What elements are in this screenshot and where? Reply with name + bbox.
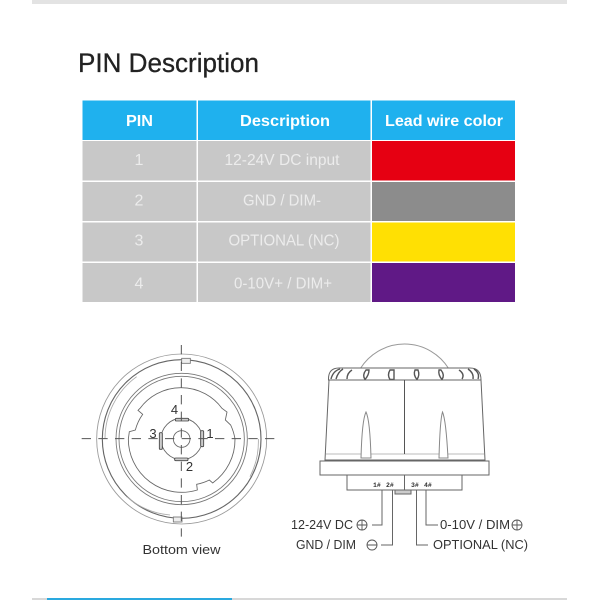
lead labels: 12-24V DC <box>291 517 353 532</box>
nub <box>395 490 411 494</box>
pin number labels: 3 <box>149 426 157 441</box>
block seam <box>404 475 406 490</box>
body <box>325 380 485 460</box>
top band <box>328 368 481 380</box>
pin number labels: 1 <box>206 426 214 441</box>
pin number labels: 4 <box>171 402 178 417</box>
centre lines <box>82 345 277 537</box>
outer rings <box>97 354 267 524</box>
header labels: Lead wire color <box>385 113 503 130</box>
centre circles <box>161 418 202 460</box>
table: PIN description <box>82 100 515 302</box>
pin markers <box>373 482 432 489</box>
pin descriptions: OPTIONAL (NC) <box>228 232 340 250</box>
dome <box>361 344 448 368</box>
band slots <box>331 369 478 380</box>
lead labels: OPTIONAL (NC) <box>433 537 528 552</box>
header labels: Description <box>240 113 330 130</box>
top and bottom tabs <box>173 358 190 522</box>
pin number labels: 2 <box>186 459 193 474</box>
pin numbers: 3 <box>135 232 144 250</box>
header labels <box>126 113 503 130</box>
body lower line <box>326 453 484 455</box>
pin descriptions: 12-24V DC input <box>224 152 340 169</box>
lead labels: 0-10V / DIM <box>440 517 510 532</box>
lead labels: GND / DIM <box>296 537 356 552</box>
lead labels <box>291 517 528 552</box>
pin markers: 3# <box>411 482 419 489</box>
pin numbers: 4 <box>135 276 144 292</box>
top divider bar <box>32 0 567 4</box>
base flange <box>320 461 489 475</box>
pin markers: 4# <box>424 482 432 489</box>
lead lines <box>372 490 438 545</box>
pin contacts <box>159 418 204 461</box>
pin numbers: 1 <box>135 152 144 169</box>
table grey cells <box>82 141 370 302</box>
polarity symbols <box>357 520 522 550</box>
title: PIN Description <box>78 48 259 78</box>
connector block <box>347 475 462 490</box>
body centre seam <box>404 380 406 454</box>
pin numbers: 2 <box>135 192 144 210</box>
table header <box>82 100 515 140</box>
right rib <box>439 412 448 458</box>
bottom divider bar <box>32 598 567 600</box>
bottom active tab indicator <box>47 598 232 600</box>
pin number labels <box>149 402 214 474</box>
pin markers: 2# <box>386 482 394 489</box>
lead wire colour swatches <box>372 141 515 302</box>
notched inner ring <box>128 388 235 492</box>
pin markers: 1# <box>373 482 381 489</box>
diagram: bottom view <box>82 345 277 537</box>
header labels: PIN <box>126 113 153 130</box>
diagram: side view <box>320 344 489 494</box>
left rib <box>361 412 371 458</box>
caption: bottom view: Bottom view <box>142 542 221 557</box>
pin descriptions <box>224 152 340 292</box>
pin numbers <box>135 152 144 292</box>
pin descriptions: GND / DIM- <box>243 192 321 210</box>
pin descriptions: 0-10V+ / DIM+ <box>234 276 332 292</box>
